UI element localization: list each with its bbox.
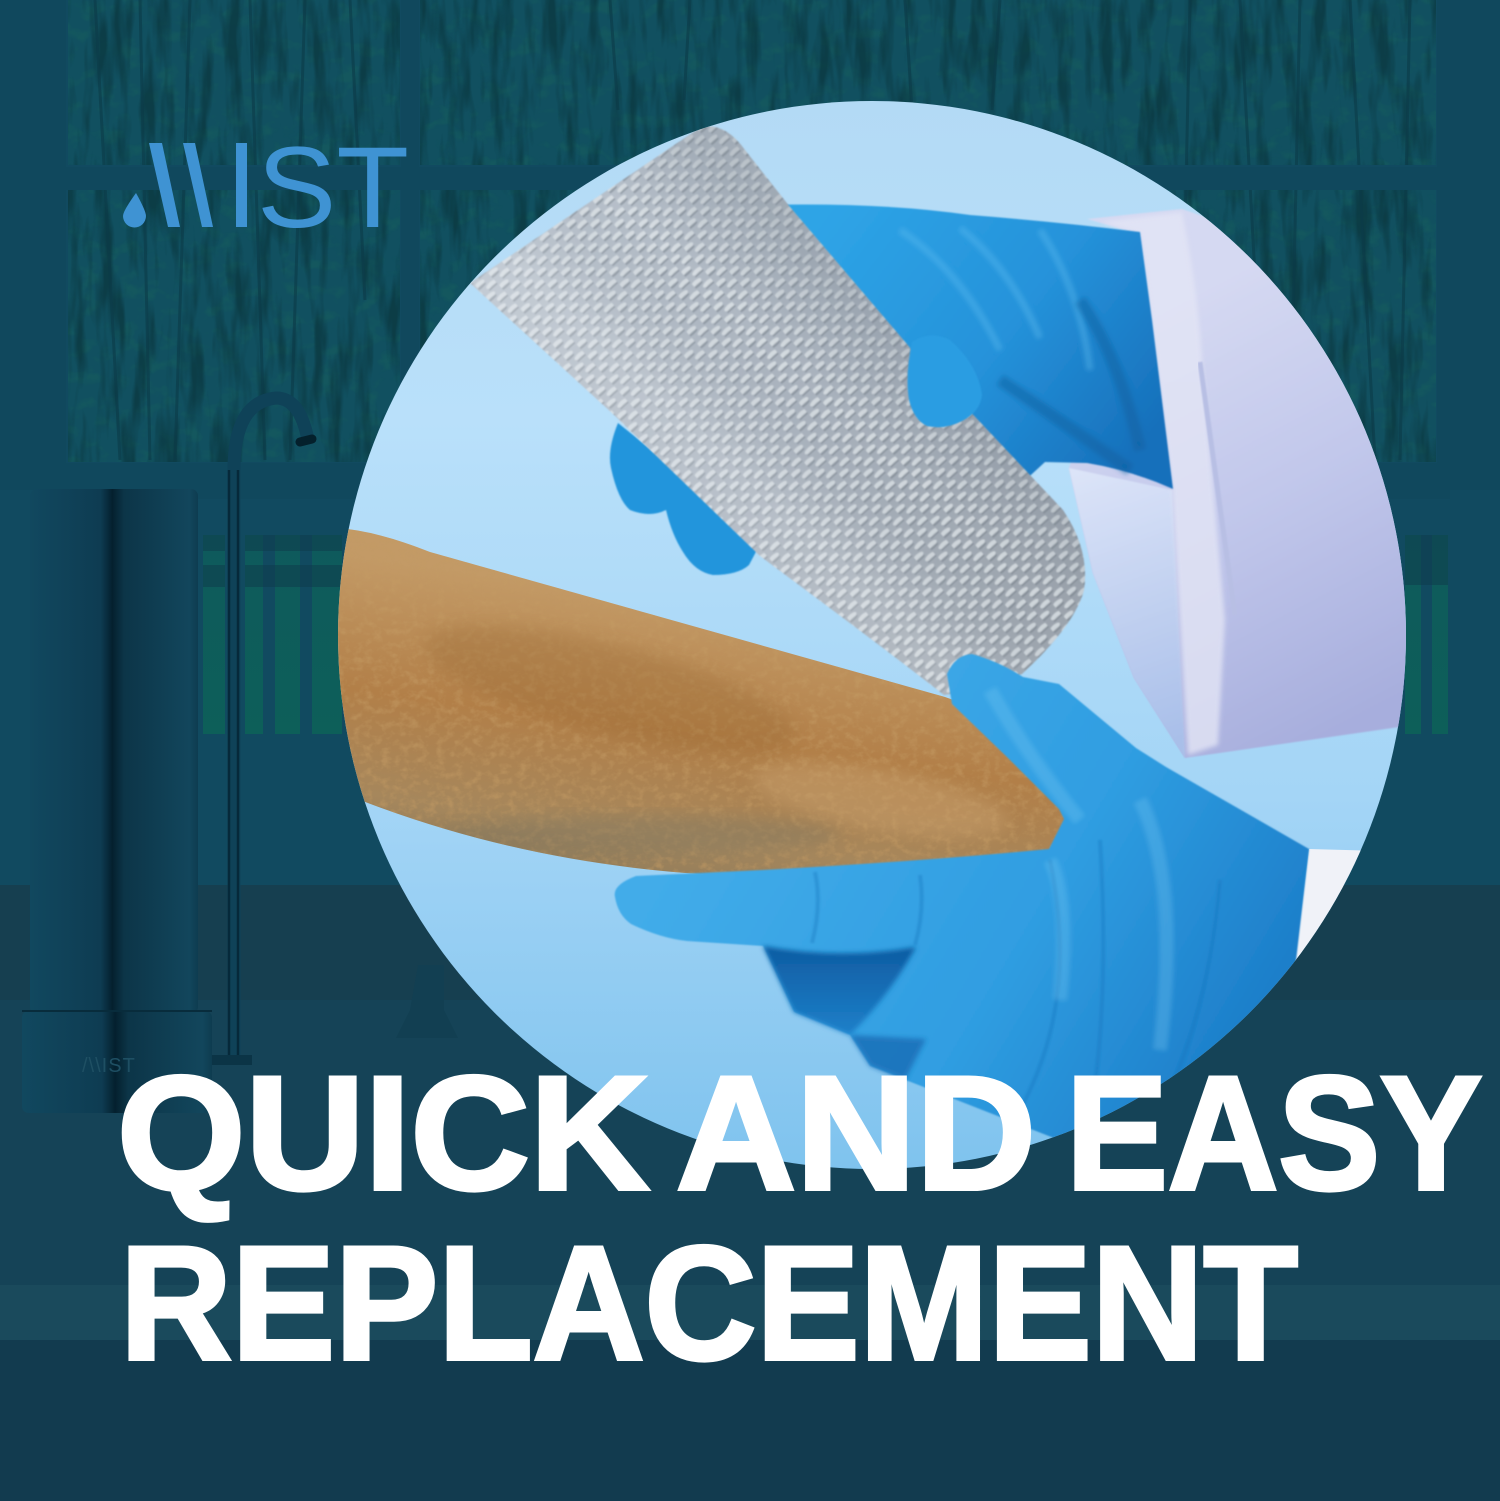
upper glove back fingers (610, 423, 758, 575)
title: EASY (1066, 1043, 1482, 1224)
window frames (0, 0, 1500, 499)
upper glove (760, 204, 1173, 489)
title: QUICK (117, 1043, 649, 1224)
faucet (212, 398, 312, 1065)
window view with trees (60, 0, 1440, 465)
logo letter I (236, 143, 247, 227)
water filter unit (22, 489, 212, 1113)
title (117, 1043, 1482, 1394)
upper glove finger over cartridge (906, 348, 982, 428)
logo letters ST: ST (257, 124, 409, 252)
soap dispenser (396, 965, 458, 1038)
photo circle (330, 95, 1420, 1175)
title: AND (676, 1043, 1036, 1224)
glove shadow under the thumb (763, 946, 916, 1035)
icon: water drop (123, 193, 146, 228)
sleeve upper (1069, 209, 1420, 758)
brown used filter cartridge (330, 520, 1090, 880)
small logo on base: /\\IST (82, 1055, 136, 1077)
logo: MIST (123, 124, 409, 252)
title: REPLACEMENT (120, 1213, 1298, 1394)
gray filter cartridge (470, 126, 1085, 695)
lower glove (615, 654, 1309, 1140)
lower cuff (1294, 849, 1361, 962)
countertop, sink and cabinet bands (0, 885, 1500, 1501)
porch railing with lawn (203, 500, 1448, 740)
logo letter M as two slanted bars (149, 143, 213, 227)
